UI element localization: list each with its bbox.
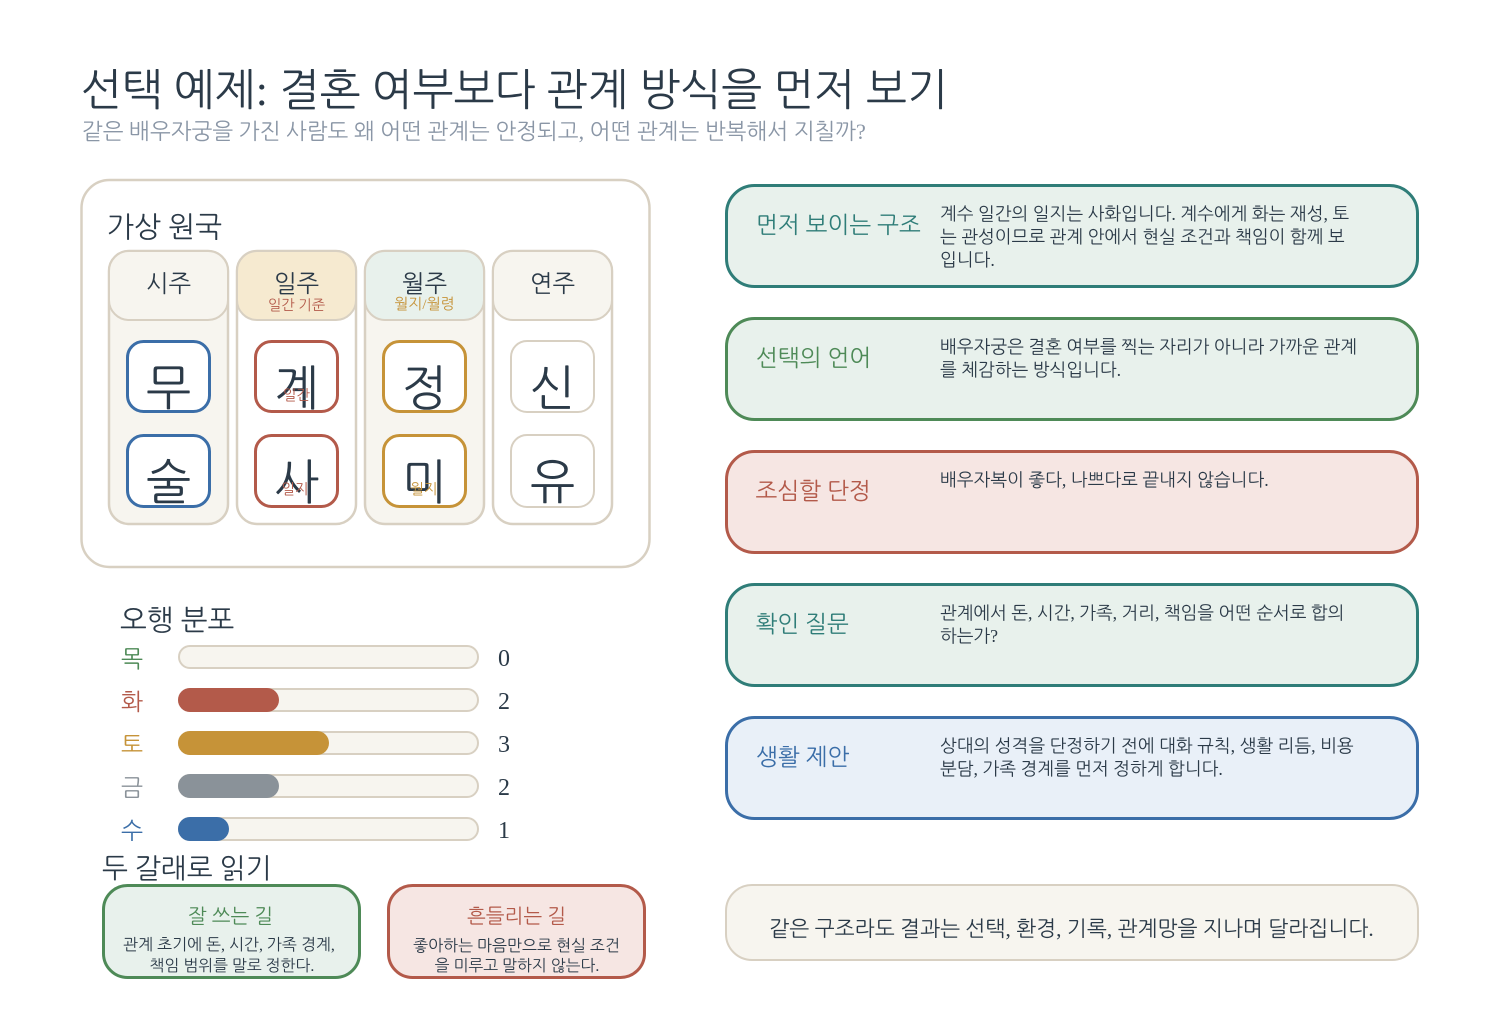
heading: two paths: 두 갈래로 읽기 (102, 853, 271, 884)
pillar: month: 월주 (402, 272, 447, 298)
bar: wood: 0 (498, 646, 510, 672)
card: language of choice: 배우자궁은 결혼 여부를 찍는 자리가 아니라 가까운 관계 (940, 337, 1357, 357)
card: language of choice: 를 체감하는 방식입니다. (940, 360, 1121, 380)
bar: metal: 금 (121, 776, 143, 802)
chart: five elements distribution (120, 606, 510, 845)
bar: water (121, 817, 510, 845)
card: check question: 관계에서 돈, 시간, 가족, 거리, 책임을 어떤 순서로 합의 (940, 603, 1344, 623)
card: check question: 확인 질문 (756, 612, 849, 638)
card: visible structure: 는 관성이므로 관계 안에서 현실 조건과 책임이 함께 보 (940, 227, 1345, 247)
card: life suggestion: 생활 제안 (756, 745, 850, 771)
card: visible structure: 먼저 보이는 구조 (756, 213, 921, 239)
card: shaky path: 을 미루고 말하지 않는다. (435, 957, 599, 975)
card: visible structure: 계수 일간의 일지는 사화입니다. 계수에게 화는 재성, 토 (940, 204, 1349, 224)
card: shaky path: 좋아하는 마음만으로 현실 조건 (413, 937, 620, 955)
card: shaky path: 흔들리는 길 (467, 906, 566, 928)
card: life suggestion: 상대의 성격을 단정하기 전에 대화 규칙, 생활 리듬, 비용 (940, 736, 1354, 756)
pillar: day: 일간 기준 (268, 297, 326, 314)
heading: five elements: 오행 분포 (120, 606, 234, 637)
bar: water: 수 (121, 819, 143, 845)
pillar: hour (109, 251, 228, 524)
pillar: month (365, 251, 484, 524)
bar: water: 1 (498, 818, 510, 844)
footer note (726, 885, 1418, 960)
card: language of choice (726, 318, 1418, 420)
footer note: 같은 구조라도 결과는 선택, 환경, 기록, 관계망을 지나며 달라집니다. (769, 917, 1374, 941)
card: check question: 하는가? (940, 626, 998, 646)
heading: virtual chart: 가상 원국 (107, 212, 222, 244)
pillar: day: 사 (274, 457, 319, 510)
card: life suggestion: 분담, 가족 경계를 먼저 정하게 합니다. (940, 759, 1223, 779)
pillar: hour: 술 (146, 457, 191, 510)
card: good path: 잘 쓰는 길 (188, 906, 273, 928)
pillar: year: 유 (530, 457, 575, 510)
pillar: year: 신 (530, 363, 575, 416)
pillar: month: 월지 (410, 482, 438, 498)
card: good path (104, 886, 360, 978)
pillar: hour: 무 (146, 363, 191, 416)
pillar: month: 미 (402, 457, 447, 510)
bar: fire: 화 (121, 690, 143, 716)
pillar: month: 정 (402, 363, 447, 416)
card: visible structure (726, 186, 1418, 286)
card: judgment to avoid (726, 452, 1418, 552)
bar: earth: 3 (498, 732, 510, 758)
pillar: year: 연주 (530, 272, 575, 298)
bar: metal (121, 774, 510, 802)
card: life suggestion (726, 718, 1418, 818)
pillar: year (493, 251, 612, 524)
pillar: month: 월지/월령 (394, 296, 455, 313)
pillar: day: 계 (274, 363, 319, 416)
card: judgment to avoid: 배우자복이 좋다, 나쁘다로 끝내지 않습니다. (940, 470, 1269, 490)
subtitle: 같은 배우자궁을 가진 사람도 왜 어떤 관계는 안정되고, 어떤 관계는 반복해서 지칠까? (82, 119, 866, 144)
bar: wood: 목 (121, 647, 143, 673)
panel: virtual chart (82, 180, 650, 567)
pillar: hour: 시주 (146, 272, 191, 298)
pillar: day: 일주 (274, 272, 319, 298)
card: good path: 관계 초기에 돈, 시간, 가족 경계, (123, 936, 335, 954)
card: visible structure: 입니다. (940, 250, 995, 270)
card: check question (726, 584, 1418, 686)
pillar: day: 일지 (281, 481, 309, 498)
bar: fire: 2 (498, 689, 510, 715)
card: judgment to avoid: 조심할 단정 (756, 479, 871, 505)
card: good path: 책임 범위를 말로 정한다. (150, 957, 314, 975)
card: shaky path (388, 886, 644, 978)
pillar: day (237, 251, 356, 524)
title: 선택 예제: 결혼 여부보다 관계 방식을 먼저 보기 (81, 67, 948, 115)
card: language of choice: 선택의 언어 (756, 346, 871, 372)
pillar: day: 일간 (283, 387, 310, 404)
bar: fire (121, 688, 510, 716)
bar: earth (121, 731, 510, 759)
bar: wood (121, 646, 510, 673)
bar: metal: 2 (498, 775, 510, 801)
bar: earth: 토 (121, 733, 143, 759)
